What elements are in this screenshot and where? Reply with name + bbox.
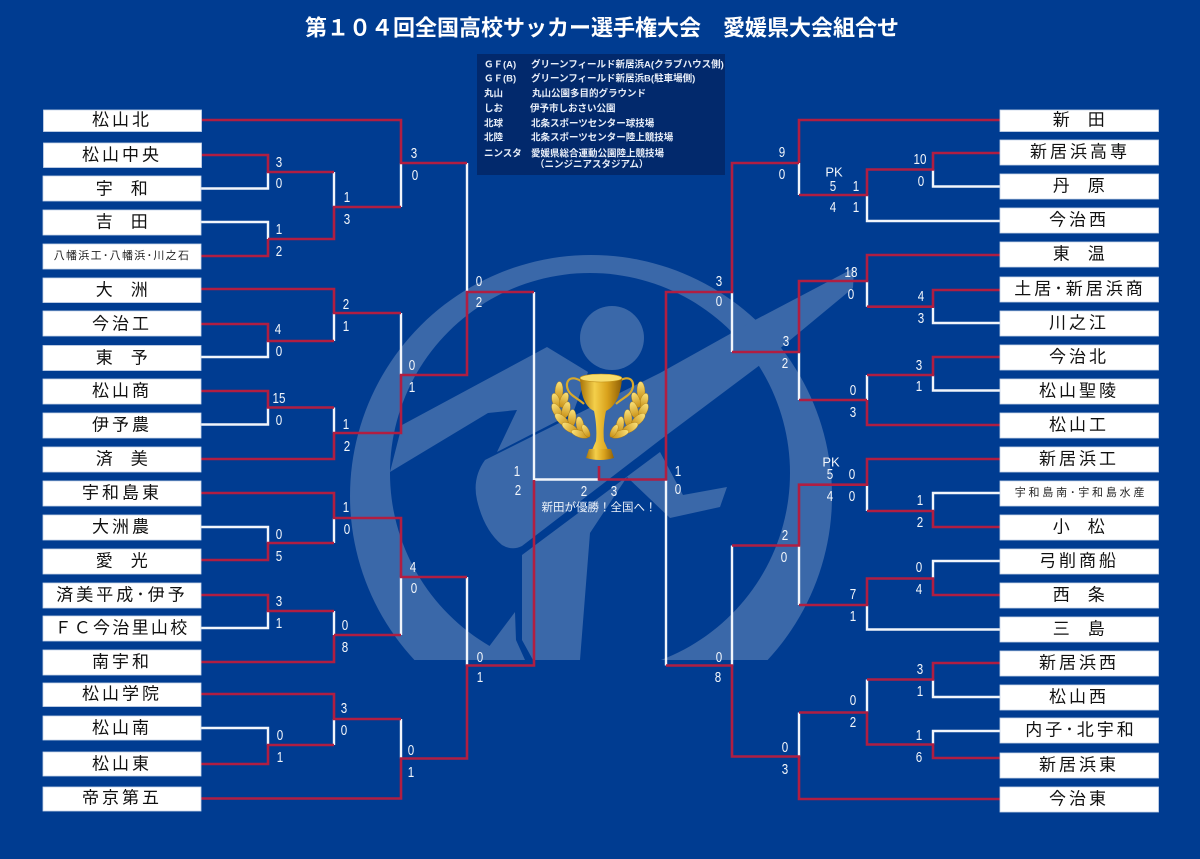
scores: right bracket: 6 — [916, 749, 922, 765]
scores: right bracket: 4 — [918, 288, 924, 304]
scores: right bracket: 0 — [779, 166, 785, 182]
panel: venue legend: 伊予市しおさい公園 — [530, 102, 616, 114]
scores: left bracket: 1 — [276, 615, 282, 631]
team: 今治東 — [1000, 787, 1158, 812]
team: 宇和島南・宇和島水産: 宇和島南･宇和島水産 — [1015, 485, 1147, 499]
scores: left bracket: 2 — [344, 438, 350, 454]
scores: left bracket: 3 — [344, 211, 350, 227]
scores: right bracket: 7 — [850, 586, 856, 602]
scores: left bracket: 2 — [276, 243, 282, 259]
scores: right bracket: 3 — [916, 357, 922, 373]
team: 大洲農 — [43, 515, 201, 540]
scores: right bracket: 0 — [781, 549, 787, 565]
team: FC今治里山校: ＦＣ今治里山校 — [54, 618, 190, 638]
scores: left bracket: 2 — [343, 296, 349, 312]
scores: left bracket: 0 — [477, 649, 483, 665]
team: 小松 — [1000, 515, 1158, 540]
scores: left bracket: 0 — [341, 722, 347, 738]
team: 松山南 — [43, 716, 201, 740]
team: 内子・北宇和 — [1000, 718, 1158, 743]
team: 吉田: 吉 田 — [96, 212, 148, 232]
team: 松山工 — [1000, 413, 1158, 438]
title: 第１０４回全国高校サッカー選手権大会 愛媛県大会組合せ — [305, 16, 899, 40]
scores: right bracket: 2 — [850, 714, 856, 730]
team: 伊予農 — [43, 413, 201, 438]
scores: right bracket: 3 — [716, 273, 722, 289]
scores: semi-finals and final: 1 — [675, 463, 681, 479]
scores: semi-finals and final: 1 — [514, 463, 520, 479]
scores: left bracket: 0 — [412, 167, 418, 183]
team: 弓削商船 — [1000, 549, 1158, 574]
team: 帝京第五 — [43, 787, 201, 811]
scores: semi-finals and final: 0 — [675, 481, 681, 497]
team: 南宇和 — [43, 650, 201, 675]
team: 宇和島東 — [43, 481, 201, 506]
team: 新居浜高専: 新居浜高専 — [1030, 142, 1130, 162]
team: 宇和島東: 宇和島東 — [82, 484, 162, 502]
scores: left bracket: 1 — [343, 416, 349, 432]
scores: right bracket: PK — [825, 164, 843, 180]
team: 松山聖陵: 松山聖陵 — [1039, 382, 1119, 400]
scores: right bracket: 3 — [782, 761, 788, 777]
scores: right bracket: PK — [822, 454, 840, 470]
scores: right bracket: 0 — [782, 739, 788, 755]
team: 松山東: 松山東 — [92, 754, 152, 774]
scores: left bracket: 1 — [344, 189, 350, 205]
panel: venue legend: 北陸 — [484, 132, 504, 144]
scores: right bracket: 1 — [917, 492, 923, 508]
scores: left bracket: 1 — [343, 499, 349, 515]
team: 東温: 東 温 — [1053, 244, 1105, 264]
team: 八幡浜工・八幡浜・川之石: 八幡浜工･八幡浜･川之石 — [54, 248, 190, 262]
scores: right bracket: 1 — [853, 178, 859, 194]
panel: venue legend: ＧＦ(B) — [484, 74, 516, 84]
scores: left bracket: 1 — [277, 749, 283, 765]
team: 松山商: 松山商 — [92, 382, 152, 400]
team: 川之江: 川之江 — [1049, 314, 1109, 332]
team: 宇和: 宇 和 — [96, 180, 148, 198]
team: 土居・新居浜商: 土居･新居浜商 — [1014, 280, 1146, 298]
team: 松山中央 — [44, 143, 202, 168]
scores: right bracket: 10 — [914, 151, 926, 167]
team: 新居浜東: 新居浜東 — [1039, 756, 1119, 774]
panel: venue legend: しお — [484, 104, 504, 114]
scores: left bracket: 1 — [477, 669, 483, 685]
team: 弓削商船: 弓削商船 — [1039, 552, 1119, 570]
scores: right bracket: 0 — [916, 559, 922, 575]
panel: venue legend: ＧＦ(A) — [484, 60, 516, 70]
panel: venue legend: グリーンフィールド新居浜A(クラブハウス側) — [531, 58, 724, 70]
team: 今治西 — [1000, 208, 1158, 233]
teams: right column — [1000, 110, 1158, 812]
team: 松山北: 松山北 — [92, 110, 152, 130]
scores: left bracket: 15 — [273, 390, 285, 406]
team: 大洲: 大 洲 — [96, 280, 148, 300]
team: 松山西 — [1000, 685, 1158, 710]
teams: left column — [43, 110, 202, 811]
scores: right bracket: 2 — [917, 514, 923, 530]
team: 小松: 小 松 — [1053, 518, 1105, 536]
team: 今治北 — [1000, 345, 1158, 370]
scores: left bracket: 0 — [342, 617, 348, 633]
scores: right bracket: 2 — [782, 527, 788, 543]
panel: venue legend: （ニンジニアスタジアム） — [535, 158, 648, 170]
scores: semi-finals and final: 2 — [515, 482, 521, 498]
team: 新居浜東 — [1000, 753, 1158, 778]
bracket lines: losing paths — [201, 163, 1000, 758]
scores: right bracket: 0 — [716, 293, 722, 309]
team: 三島: 三 島 — [1053, 620, 1105, 638]
scores: left bracket: 5 — [276, 548, 282, 564]
team: 新田: 新 田 — [1053, 110, 1105, 130]
team: 新居浜工 — [1000, 447, 1158, 472]
scores: left bracket: 0 — [408, 742, 414, 758]
watermark logo — [350, 255, 854, 660]
team: 新居浜西: 新居浜西 — [1039, 654, 1119, 672]
team: 松山学院: 松山学院 — [82, 684, 162, 704]
team: 新田 — [1000, 110, 1158, 132]
scores: right bracket: 2 — [782, 355, 788, 371]
scores: right bracket: 0 — [849, 488, 855, 504]
scores: left bracket: 8 — [342, 639, 348, 655]
scores: semi-finals and final: 2 — [581, 483, 587, 499]
scores: left bracket: 0 — [344, 521, 350, 537]
scores: left bracket: 4 — [275, 321, 281, 337]
scores: left bracket: 0 — [476, 273, 482, 289]
bracket lines: winning paths — [201, 120, 1000, 799]
scores: left bracket: 0 — [411, 580, 417, 596]
team: 松山工: 松山工 — [1049, 416, 1109, 434]
team: 内子・北宇和: 内子･北宇和 — [1025, 720, 1137, 740]
scores: right bracket: 5 — [830, 178, 836, 194]
panel: venue legend: 北条スポーツセンター球技場 — [531, 118, 655, 130]
scores: left bracket: 0 — [277, 727, 283, 743]
scores: right bracket: 4 — [916, 581, 922, 597]
scores: right bracket: 1 — [916, 727, 922, 743]
team: 松山南: 松山南 — [92, 718, 152, 738]
scores: left bracket: 1 — [408, 764, 414, 780]
scores: left bracket: 1 — [276, 221, 282, 237]
panel: venue legend: ニンスタ — [484, 148, 522, 160]
scores: left bracket: 0 — [276, 526, 282, 542]
team: 松山商 — [43, 379, 201, 404]
scores: left bracket: 0 — [276, 175, 282, 191]
team: 八幡浜工・八幡浜・川之石 — [43, 244, 201, 269]
icon: gold trophy with laurels — [549, 374, 651, 460]
team: 丹原: 丹 原 — [1053, 176, 1105, 196]
scores: left bracket: 4 — [410, 559, 416, 575]
scores: right bracket: 9 — [779, 144, 785, 160]
scores: right bracket: 8 — [715, 669, 721, 685]
team: 済美平成・伊予: 済美平成･伊予 — [56, 586, 188, 604]
team: 松山北 — [44, 110, 202, 132]
scores: left bracket: 1 — [409, 379, 415, 395]
team: 新居浜高専 — [1000, 140, 1158, 165]
team: 川之江 — [1000, 311, 1158, 336]
scores: right bracket: 18 — [845, 264, 857, 280]
team: 今治東: 今治東 — [1049, 790, 1109, 808]
scores: right bracket: 0 — [850, 692, 856, 708]
team: 愛光: 愛 光 — [96, 552, 148, 570]
champion caption: 新田が優勝！全国へ！ — [542, 500, 656, 514]
team: 松山学院 — [43, 683, 201, 706]
scores: right bracket: 1 — [916, 378, 922, 394]
scores: left bracket: 3 — [276, 593, 282, 609]
scores: right bracket: 5 — [827, 466, 833, 482]
scores: left bracket: 0 — [409, 357, 415, 373]
team: 東予: 東 予 — [96, 348, 148, 368]
scores: left bracket: 0 — [276, 412, 282, 428]
team: 土居・新居浜商 — [1000, 277, 1158, 302]
scores: left bracket — [273, 145, 483, 780]
team: 大洲 — [43, 278, 201, 302]
scores: left bracket: 3 — [341, 700, 347, 716]
team: 済美平成・伊予 — [43, 583, 201, 608]
team: 新居浜西 — [1000, 651, 1158, 676]
panel: venue legend: 北球 — [484, 118, 504, 130]
scores: right bracket: 1 — [850, 608, 856, 624]
scores: right bracket: 0 — [918, 173, 924, 189]
scores: right bracket: 3 — [918, 310, 924, 326]
scores: semi-finals and final: 3 — [611, 483, 617, 499]
team: 帝京第五: 帝京第五 — [82, 788, 162, 808]
team: 宇和 — [43, 176, 201, 201]
scores: right bracket: 0 — [716, 649, 722, 665]
team: 今治工: 今治工 — [92, 314, 152, 334]
team: 愛光 — [43, 549, 201, 574]
team: 済美 — [43, 447, 201, 472]
team: 西条: 西 条 — [1053, 586, 1105, 604]
team: 松山聖陵 — [1000, 379, 1158, 404]
scores: right bracket: 3 — [850, 404, 856, 420]
scores: left bracket: 3 — [276, 154, 282, 170]
scores: right bracket: 0 — [849, 466, 855, 482]
team: 松山西: 松山西 — [1049, 688, 1109, 706]
scores: right bracket: 1 — [917, 683, 923, 699]
team: 南宇和: 南宇和 — [92, 652, 152, 672]
panel: venue legend: グリーンフィールド新居浜B(駐車場側) — [531, 72, 695, 84]
team: FC今治里山校 — [43, 616, 201, 641]
scores: left bracket: 1 — [343, 318, 349, 334]
team: 西条 — [1000, 583, 1158, 608]
panel: venue legend: 愛媛県総合運動公園陸上競技場 — [531, 148, 665, 160]
scores: right bracket — [715, 144, 926, 777]
scores: right bracket: 3 — [783, 333, 789, 349]
scores: left bracket: 2 — [476, 294, 482, 310]
team: 宇和島南・宇和島水産 — [1000, 481, 1158, 506]
scores: right bracket: 0 — [848, 286, 854, 302]
team: 新居浜工: 新居浜工 — [1039, 450, 1119, 468]
team: 松山東 — [43, 752, 201, 776]
scores: right bracket: 4 — [830, 199, 836, 215]
team: 吉田 — [43, 210, 201, 235]
panel: venue legend: 丸山公園多目的グラウンド — [532, 88, 646, 100]
panel: venue legend: 丸山 — [484, 88, 503, 100]
team: 今治工 — [43, 311, 201, 336]
scores: right bracket: 1 — [853, 199, 859, 215]
panel: venue legend — [477, 54, 725, 175]
team: 済美: 済 美 — [96, 450, 148, 468]
scores: semi-finals and final — [514, 463, 681, 499]
team: 東予 — [43, 346, 201, 370]
team: 大洲農: 大洲農 — [92, 518, 152, 536]
team: 三島 — [1000, 617, 1158, 642]
scores: right bracket: 0 — [850, 382, 856, 398]
scores: left bracket: 0 — [276, 343, 282, 359]
team: 今治北: 今治北 — [1049, 348, 1109, 366]
team: 丹原 — [1000, 174, 1158, 199]
scores: right bracket: 3 — [917, 661, 923, 677]
scores: left bracket: 3 — [411, 145, 417, 161]
team: 松山中央: 松山中央 — [82, 146, 162, 164]
scores: right bracket: 4 — [827, 488, 833, 504]
panel: venue legend: 北条スポーツセンター陸上競技場 — [531, 132, 674, 144]
team: 伊予農: 伊予農 — [92, 416, 152, 434]
team: 今治西: 今治西 — [1049, 210, 1109, 230]
team: 東温 — [1000, 242, 1158, 267]
